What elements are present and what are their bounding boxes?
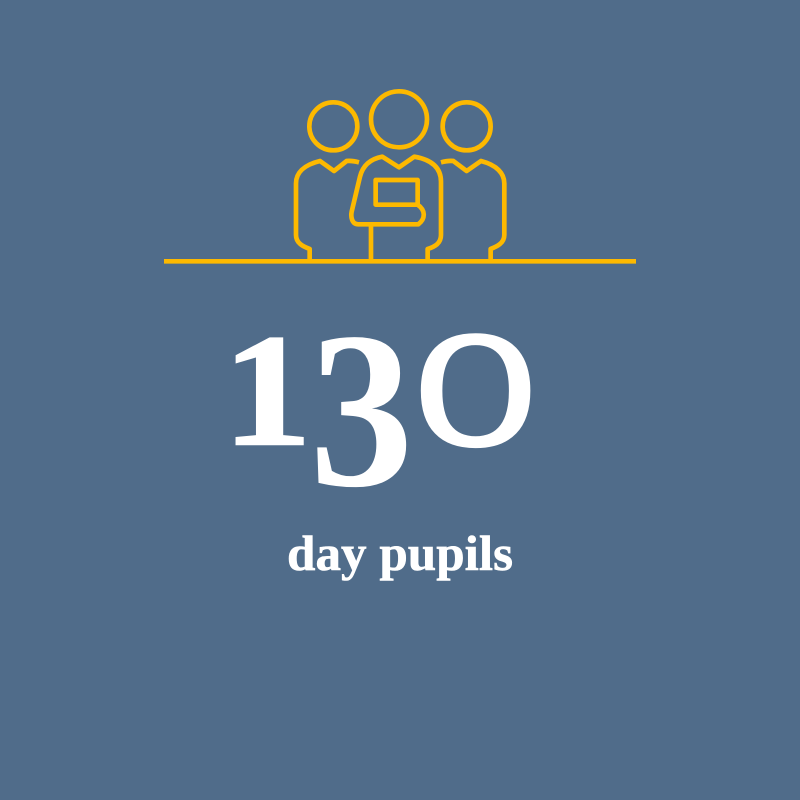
baseline rule bbox=[164, 259, 636, 264]
caption: day pupils bbox=[287, 525, 513, 581]
icon: centre pupil holding book bbox=[351, 91, 441, 261]
icon: left pupil bbox=[296, 102, 359, 261]
icon: right pupil bbox=[441, 102, 504, 261]
big number bbox=[222, 286, 545, 534]
digit 1: 1 bbox=[222, 301, 312, 479]
digit 0: 0 bbox=[406, 306, 545, 482]
icon: three pupils group bbox=[164, 91, 636, 261]
digit 3: 3 bbox=[310, 286, 413, 534]
